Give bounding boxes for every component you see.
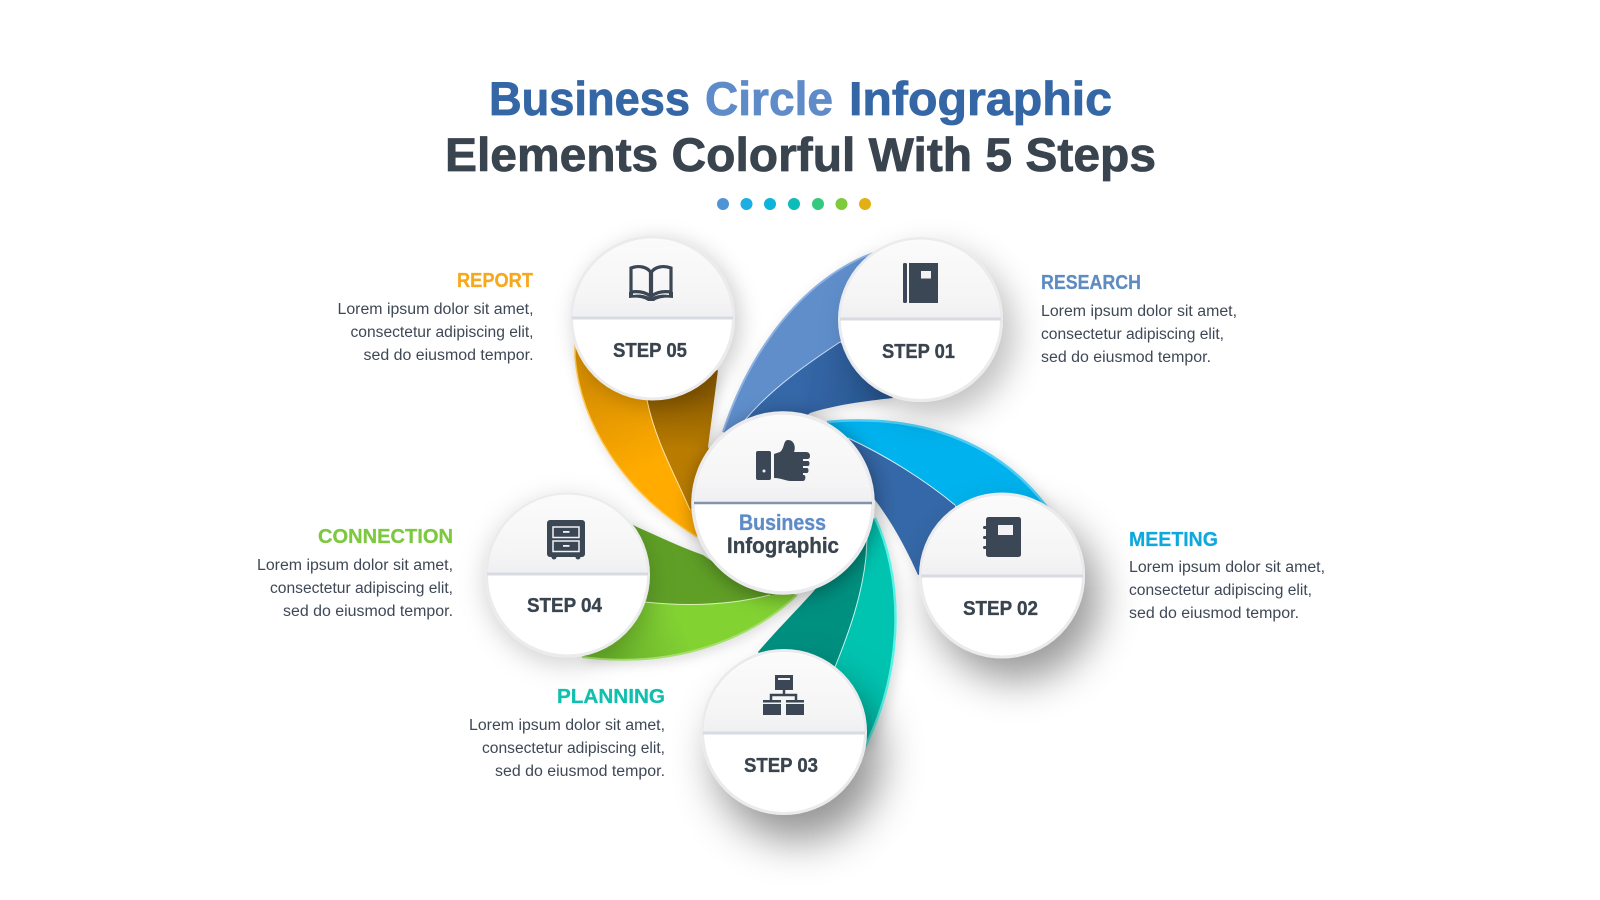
text block: planning: consectetur adipiscing elit, [482,740,665,757]
text block: report: Lorem ipsum dolor sit amet, [338,301,534,318]
text block: planning [469,685,665,780]
text block: research: RESEARCH [1041,271,1141,294]
text block: meeting: Lorem ipsum dolor sit amet, [1129,559,1325,576]
step 03 circle [702,650,866,814]
text block: report: consectetur adipiscing elit, [350,324,534,341]
label: step 04: STEP 04 [527,594,603,617]
text block: meeting: sed do eiusmod tempor. [1129,605,1299,622]
label: step 03: STEP 03 [744,754,818,777]
text block: connection: consectetur adipiscing elit, [270,580,453,597]
title: Business [489,73,690,126]
text block: report [338,269,534,364]
icon: open book [629,267,673,301]
icon: thumbs up [756,440,810,481]
text block: connection: CONNECTION [318,525,453,548]
text block: connection: sed do eiusmod tempor. [283,603,453,620]
label: business infographic [727,510,839,558]
text block: research: consectetur adipiscing elit, [1041,326,1224,343]
dot row [717,198,871,210]
step 01 circle [840,238,1002,400]
icon: notebook [903,263,938,303]
ribbon: meeting cyan [827,420,1050,575]
text block: research [1041,271,1237,366]
step 02 circle [920,494,1084,657]
title: Elements Colorful With 5 Steps [445,129,1156,182]
icon: file cabinet [547,520,585,560]
text block: connection: Lorem ipsum dolor sit amet, [257,557,453,574]
label: business infographic: Business [739,510,826,535]
label: step 02: STEP 02 [963,597,1038,620]
label: business infographic: Infographic [727,533,839,558]
text block: meeting [1129,528,1325,622]
ribbon: planning teal [758,518,896,747]
title: Infographic [849,73,1112,126]
text block: planning: sed do eiusmod tempor. [495,763,665,780]
text block: report: REPORT [457,269,533,292]
label: step 05: STEP 05 [613,339,687,362]
icon: org chart [763,675,804,715]
text block: research: sed do eiusmod tempor. [1041,349,1211,366]
step 04 circle [486,494,648,656]
text block: report: sed do eiusmod tempor. [364,347,534,364]
ribbon: report orange [575,340,725,537]
icon: spiral notebook [983,517,1021,557]
step 05 circle [572,237,734,399]
ribbon: connection green [582,522,797,660]
ribbon: research blue [723,252,893,450]
text block: meeting: MEETING [1129,528,1218,551]
text block: meeting: consectetur adipiscing elit, [1129,582,1312,599]
text block: planning: PLANNING [557,685,665,708]
text block: connection [257,525,453,620]
title [445,73,1156,182]
title: Circle [705,73,833,126]
label: step 01: STEP 01 [882,340,955,363]
text block: planning: Lorem ipsum dolor sit amet, [469,717,665,734]
center circle [693,413,873,593]
text block: research: Lorem ipsum dolor sit amet, [1041,303,1237,320]
